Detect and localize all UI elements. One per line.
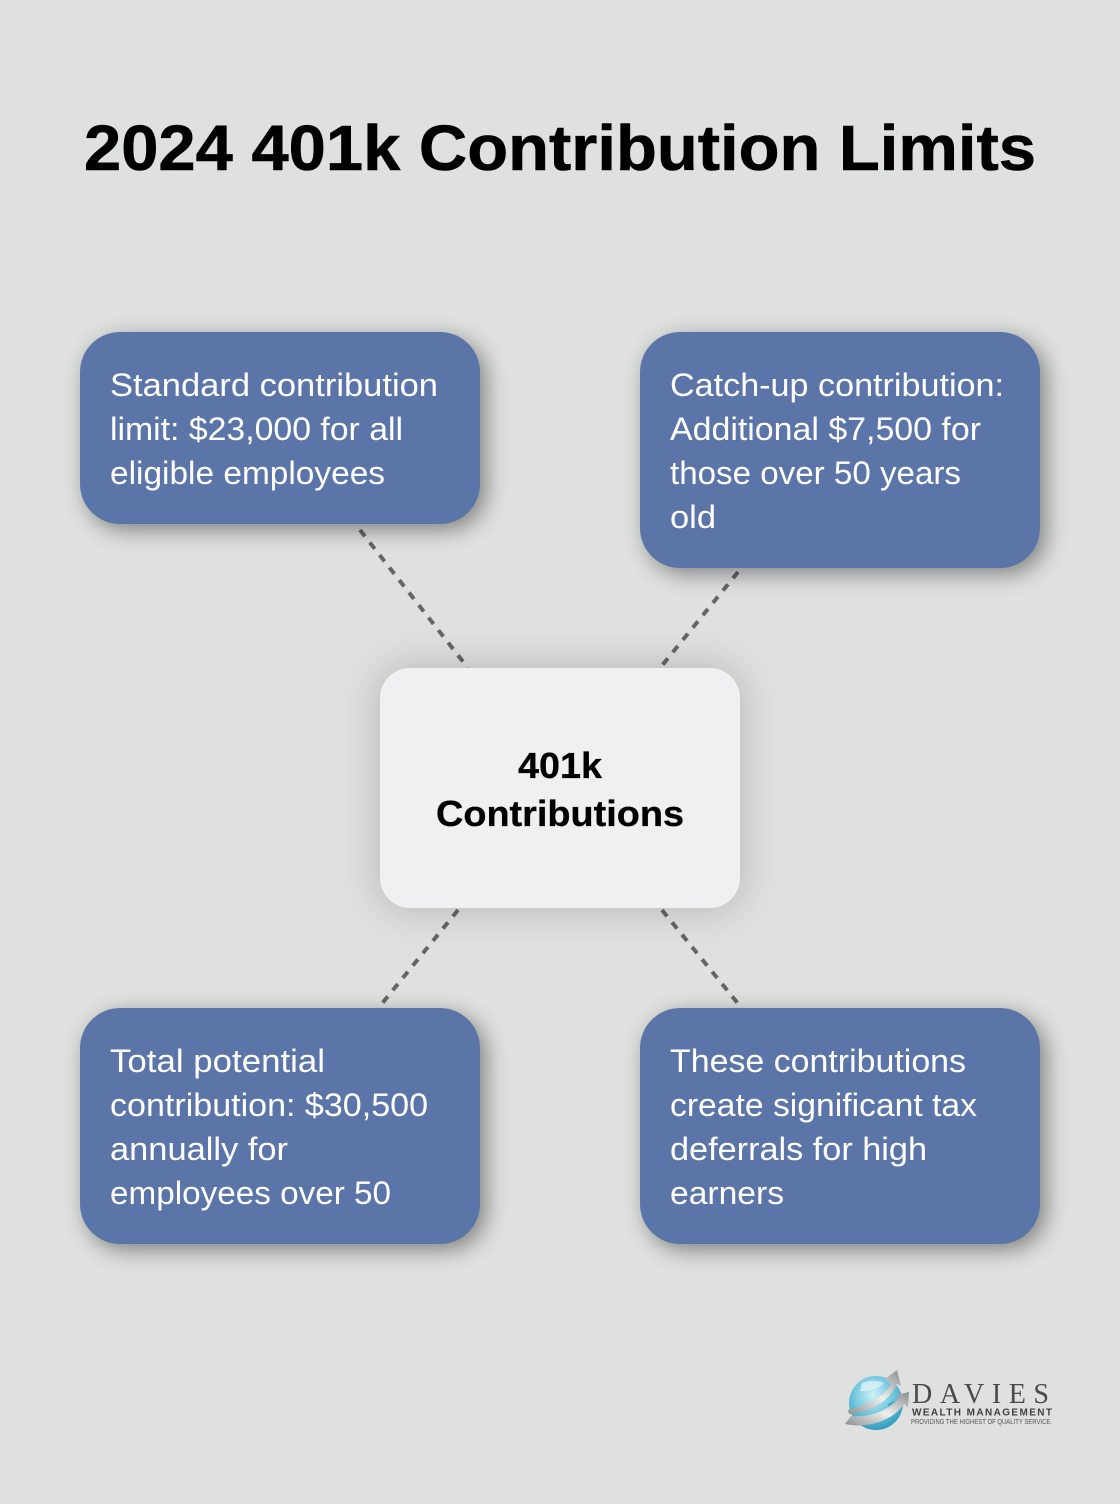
connector: total potential to center <box>380 910 458 1006</box>
panel: total potential contribution <box>80 1008 480 1244</box>
panel: tax deferrals: These contributions <box>670 1043 966 1079</box>
title: 2024 401k Contribution Limits <box>84 112 1036 184</box>
logo: Davies Wealth Management <box>845 1370 1052 1430</box>
panel: standard contribution: Standard contribution <box>110 367 438 403</box>
connector: tax deferrals to center <box>662 910 740 1006</box>
panel: tax deferrals: earners <box>670 1175 784 1211</box>
panel: center 401k contributions: Contributions <box>436 793 684 834</box>
panel: total potential contribution: employees over 50 <box>110 1175 391 1211</box>
panel: catch-up contribution: old <box>670 499 716 535</box>
panel: tax deferrals: deferrals for high <box>670 1131 927 1167</box>
logo wordmark: DAVIES <box>912 1379 1049 1410</box>
panel: catch-up contribution: Catch-up contribution: <box>670 367 1004 403</box>
connector: catch-up to center <box>660 572 738 668</box>
panel: total potential contribution: annually for <box>110 1131 288 1167</box>
logo subtitle: WEALTH MANAGEMENT <box>912 1408 1052 1418</box>
panel: tax deferrals <box>640 1008 1040 1244</box>
panel: standard contribution: eligible employees <box>110 455 385 491</box>
panel: standard contribution <box>80 332 480 524</box>
logo tagline: PROVIDING THE HIGHEST OF QUALITY SERVICE. <box>911 1419 1052 1426</box>
panel: center 401k contributions <box>380 668 740 908</box>
panel: catch-up contribution: those over 50 years <box>670 455 961 491</box>
panel: standard contribution: limit: $23,000 for all <box>110 411 403 447</box>
panel: total potential contribution: Total potential <box>110 1043 325 1079</box>
panel: catch-up contribution <box>640 332 1040 568</box>
panel: tax deferrals: create significant tax <box>670 1087 977 1123</box>
icon: globe with arrows <box>845 1370 909 1430</box>
connector: standard limit to center <box>360 530 468 668</box>
panel: center 401k contributions: 401k <box>518 745 603 786</box>
panel: catch-up contribution: Additional $7,500 for <box>670 411 981 447</box>
panel: total potential contribution: contribution: $30,500 <box>110 1087 428 1123</box>
